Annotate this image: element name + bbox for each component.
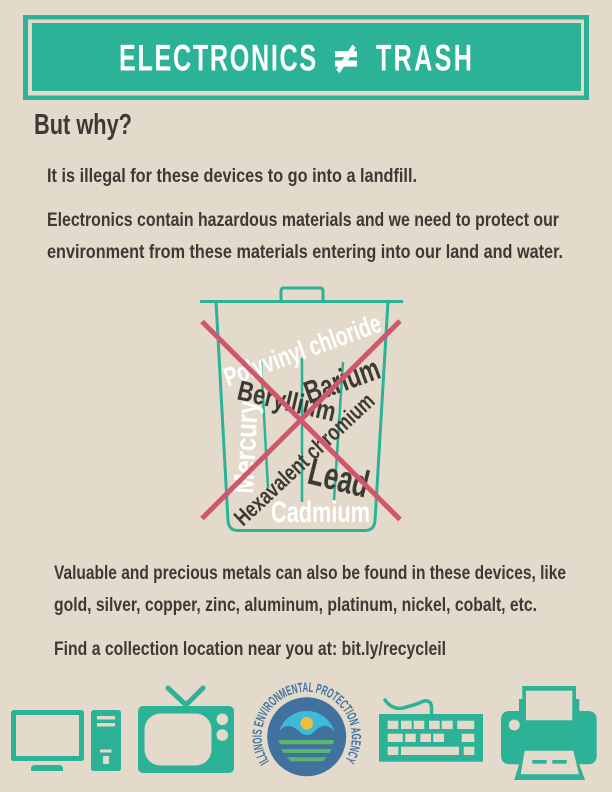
icon: trash can outline [200,288,403,530]
icon: keyboard [379,700,483,762]
text block: precious metals [54,562,566,616]
red cross [202,321,400,520]
word: Lead: Lead [304,451,373,506]
title banner: ≠ [332,33,360,82]
word: Polyvinyl chloride: Polyvinyl chloride [220,308,385,393]
word: Mercury: Mercury [228,400,265,494]
logo: Illinois Environmental Protection Agency: ILLINOIS ENVIRONMENTAL PROTECTION AGENCY [252,682,362,766]
title banner: TRASH [376,37,472,79]
icon: desktop computer [11,710,121,771]
title banner: ELECTRONICS [119,37,316,79]
trash can with crossed-out hazardous materials [200,288,403,531]
text block: why electronics are banned from landfills [47,165,563,263]
word: Beryllium: Beryllium [235,375,339,427]
title banner [23,15,589,100]
icon: printer [501,686,597,780]
heading: But why?: But why? [34,109,132,141]
word: Hexavalent chromium: Hexavalent chromium [229,388,380,531]
word: Cadmium: Cadmium [271,496,370,529]
icon: television [138,688,234,773]
word: Barium: Barium [299,350,385,411]
text block: why electronics are banned from landfills: It is illegal for these devices to go into a landfill. [47,165,417,187]
text block: collection location: Find a collection location near you at: bit.ly/recycleil [54,638,446,660]
